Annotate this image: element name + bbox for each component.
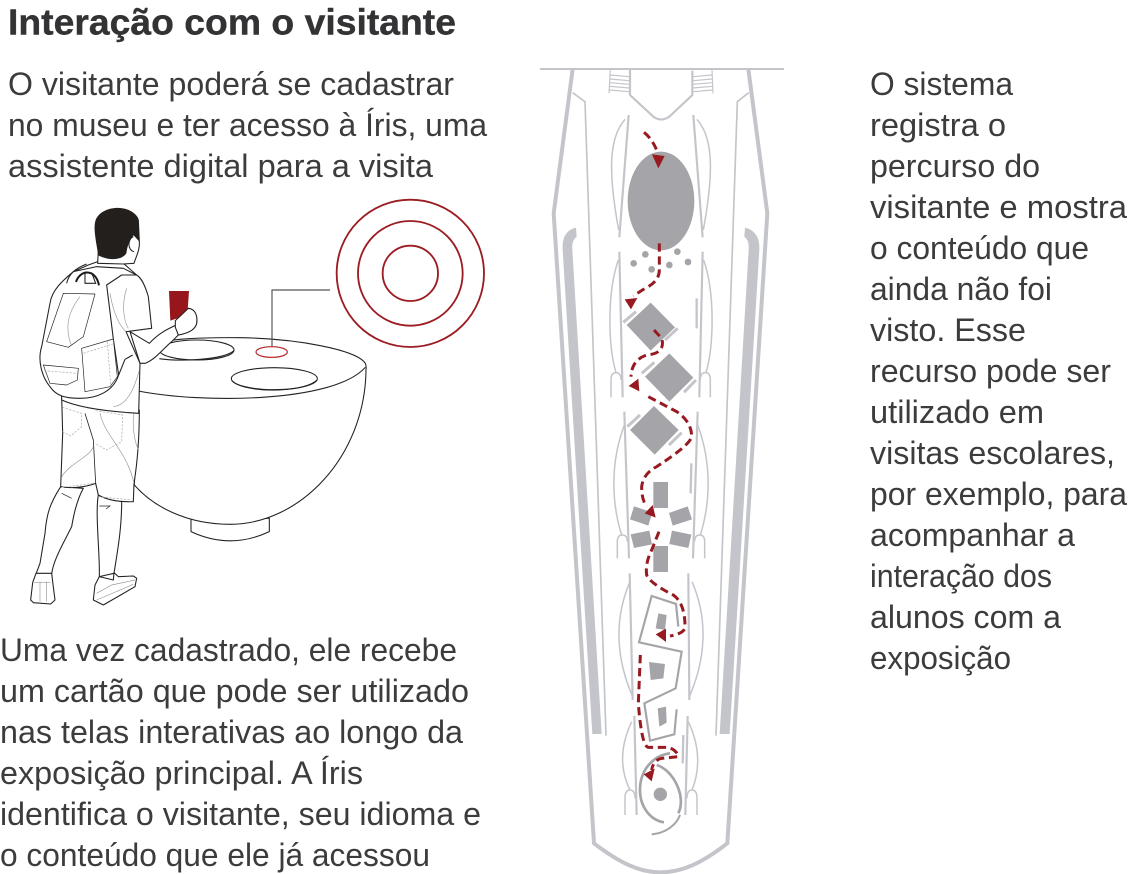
- text block: route tracking: [870, 66, 1128, 676]
- text block: route tracking: recurso pode ser: [870, 353, 1111, 389]
- circular final room: [640, 753, 681, 834]
- radial screens: [630, 482, 692, 572]
- red sensor marker: [256, 347, 287, 357]
- text block: route tracking: O sistema: [870, 66, 1014, 102]
- arm and hand: [130, 308, 197, 363]
- illustration: visitor at interactive table: [31, 200, 484, 605]
- dots: [630, 248, 691, 273]
- angled rooms: [639, 596, 682, 741]
- backpack: [40, 267, 137, 398]
- text block: introduction: no museu e ter acesso à Íris, uma: [8, 107, 488, 143]
- floor plan: museum route: [540, 69, 784, 872]
- text block: route tracking: interação dos: [870, 558, 1052, 594]
- red card: [169, 291, 189, 321]
- text block: route tracking: visto. Esse: [870, 312, 1026, 348]
- text block: route tracking: ainda não foi: [870, 271, 1052, 307]
- text block: introduction: assistente digital para a visita: [8, 148, 434, 184]
- text block: card explanation: nas telas interativas ao longo da: [0, 714, 464, 750]
- text block: route tracking: por exemplo, para: [870, 476, 1128, 512]
- text block: route tracking: o conteúdo que: [870, 230, 1089, 266]
- text block: route tracking: utilizado em: [870, 394, 1044, 430]
- text block: route tracking: visitas escolares,: [870, 435, 1115, 471]
- text block: route tracking: percurso do: [870, 148, 1040, 184]
- visitor route dashed: [625, 132, 692, 781]
- text block: introduction: O visitante poderá se cadastrar: [8, 66, 454, 102]
- text block: card explanation: Uma vez cadastrado, ele recebe: [0, 632, 457, 668]
- text block: route tracking: visitante e mostra: [870, 189, 1128, 225]
- head and neck: [98, 220, 139, 264]
- shorts: [61, 397, 139, 502]
- fingers holding card: [175, 308, 197, 335]
- text block: card explanation: identifica o visitante, seu idioma e: [0, 796, 481, 832]
- visitor figure: [31, 208, 197, 605]
- text block: card explanation: o conteúdo que ele já acessou: [0, 837, 430, 873]
- text block: route tracking: acompanhar a: [870, 517, 1076, 553]
- text block: introduction: [8, 66, 488, 184]
- text block: route tracking: alunos com a: [870, 599, 1062, 635]
- text block: route tracking: registra o: [870, 107, 1006, 143]
- top wall line: [540, 66, 784, 72]
- gallery partitions left: [610, 115, 637, 815]
- title: Interação com o visitante: [8, 2, 456, 42]
- legs and shoes: [31, 397, 139, 605]
- diamond exhibits: [623, 303, 696, 455]
- icon: concentric sensor circles: [337, 200, 484, 347]
- text block: card explanation: exposição principal. A Íris: [0, 755, 363, 791]
- callout leader line: [272, 290, 330, 349]
- central oval exhibit: [628, 152, 694, 250]
- text block: card explanation: um cartão que pode ser utilizado: [0, 673, 469, 709]
- text block: route tracking: exposição: [870, 640, 1011, 676]
- interactive table: [134, 338, 366, 541]
- gallery partitions right: [683, 115, 712, 815]
- building walls: [554, 69, 767, 872]
- shirt: [62, 262, 152, 413]
- text block: card explanation: [0, 632, 481, 873]
